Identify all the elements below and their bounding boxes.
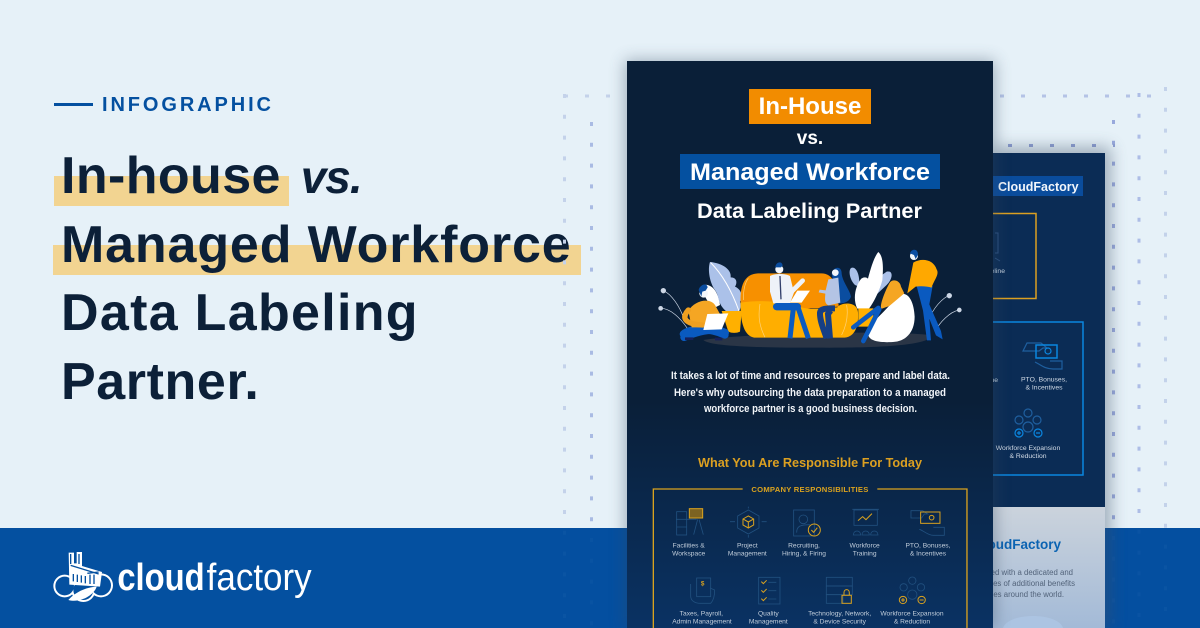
wordmark: factory: factory: [207, 556, 312, 598]
label: training: Workforce: [850, 542, 880, 549]
label: project: [728, 542, 767, 557]
intro paragraph: workforce partner is a good business decision.: [703, 403, 917, 415]
section heading: What You Are Responsible For Today: [698, 455, 923, 470]
intro paragraph: [671, 370, 950, 415]
label: PTO: & Incentives: [910, 550, 947, 557]
highlight: Managed Workforce: [53, 245, 581, 275]
label: tech: Technology, Network,: [808, 610, 871, 617]
gold frame: [653, 489, 967, 628]
label: facilities: Facilities &: [673, 542, 705, 549]
text: PTO label: PTO, Bonuses,: [1021, 376, 1067, 384]
back page blue box: [985, 322, 1083, 475]
icon: PTO: [1023, 343, 1062, 369]
back page section heading: CloudFactory: [974, 537, 1061, 552]
person: standing man: [907, 250, 943, 340]
label: PTO: [905, 542, 951, 557]
back page paragraph: companies around the world.: [964, 590, 1064, 599]
back page paragraph: opportunities of additional benefits: [957, 579, 1075, 588]
label: expansion: [880, 610, 944, 625]
text: vs.: vs.: [797, 128, 823, 149]
icon: recruiting: [794, 510, 820, 536]
badge: In-House: In-House: [759, 93, 861, 120]
back page badge: CloudFactory: [993, 176, 1083, 196]
back page paragraph: [993, 569, 1075, 597]
label: project: Project: [737, 542, 758, 549]
left plant: [703, 262, 742, 333]
label: PTO: PTO, Bonuses,: [905, 542, 951, 549]
back page blue box: Line: [985, 377, 998, 384]
badge: Managed Workforce: [680, 154, 940, 189]
panel: company responsibilities: [653, 485, 967, 628]
text: expansion label: & Reduction: [1009, 453, 1047, 460]
title line: Partner.: Partner.: [61, 353, 259, 411]
text: PTO label: & Incentives: [1025, 384, 1063, 392]
dot grid background: [564, 87, 1168, 628]
label: taxes: [672, 610, 732, 625]
back page gold box: [993, 212, 1037, 300]
text: PTO label: [1022, 377, 1066, 390]
back page circle: [1003, 616, 1063, 628]
intro paragraph: It takes a lot of time and resources to prepare and label data.: [671, 370, 950, 382]
icon: tech: [826, 577, 852, 603]
label: project: Management: [728, 550, 767, 557]
back page panel: [993, 153, 1105, 628]
intro paragraph: Here's why outsourcing the data preparation to a managed: [674, 387, 946, 399]
back page gold box: Pipeline: [981, 268, 1005, 275]
label: tech: & Device Security: [813, 618, 867, 625]
icon: taxes: [691, 578, 715, 603]
label: recruiting: [782, 542, 826, 557]
label: quality: Management: [749, 618, 788, 625]
person: woman on beanbag: [853, 280, 915, 342]
illustration: team on sofa: [659, 250, 961, 348]
subheading: Data Labeling Partner: Data Labeling Partner: [697, 200, 922, 223]
eyebrow: INFOGRAPHIC: INFOGRAPHIC: [102, 94, 274, 116]
wires: [659, 288, 961, 330]
label: facilities: Workspace: [672, 550, 706, 557]
label: expansion: & Reduction: [894, 618, 930, 625]
band tint over dots: [550, 528, 1200, 628]
label: quality: Quality: [758, 610, 779, 617]
label: recruiting: Recruiting,: [788, 542, 820, 549]
icon: expansion: [899, 577, 925, 604]
main page shadow: [625, 60, 995, 628]
eyebrow rule: [54, 103, 93, 106]
label: recruiting: Hiring, & Firing: [782, 550, 826, 557]
main page panel: [627, 61, 993, 628]
icon: cloud and factory: [53, 552, 113, 602]
person: man with laptop: [770, 262, 810, 338]
label: training: Training: [853, 550, 877, 557]
frame label: COMPANY RESPONSIBILITIES: [751, 485, 869, 494]
title line: Data Labeling: Data Labeling: [61, 284, 419, 342]
icon: project: [730, 507, 767, 538]
title line: Managed Workforce: Managed Workforce: [61, 216, 571, 274]
label: taxes: Admin Management: [672, 618, 732, 625]
sofa: [741, 273, 858, 338]
wordmark: cloud: cloud: [117, 556, 205, 598]
highlight: In-house: [54, 176, 289, 206]
logo: cloudfactory: [53, 552, 312, 602]
badge: Managed Workforce: Managed Workforce: [690, 159, 930, 186]
icon: taxes: $: [701, 580, 705, 587]
right plant: [850, 252, 892, 327]
floor shadow: [703, 333, 930, 348]
bottom brand band: [0, 528, 1200, 628]
icon: facilities: [676, 509, 703, 535]
person: woman in centre: [819, 268, 851, 338]
person: man on floor: [683, 285, 728, 339]
label: tech: [808, 610, 871, 625]
back page paragraph: partnered with a dedicated and: [966, 568, 1073, 577]
icon: PTO: [911, 511, 944, 535]
label: taxes: Taxes, Payroll,: [680, 610, 723, 617]
badge: In-House: [749, 89, 871, 124]
text: expansion label: Workforce Expansion: [996, 445, 1060, 452]
icon: training: [852, 509, 879, 535]
infographic preview mockup: [563, 50, 1167, 628]
icon: expansion: [1015, 409, 1042, 437]
label: training: [850, 542, 880, 557]
back page shadow: [993, 147, 1111, 628]
text: expansion label: [996, 446, 1060, 458]
label: facilities: [672, 542, 706, 557]
back page badge: CloudFactory: CloudFactory: [998, 180, 1079, 194]
icon: quality: [759, 577, 780, 604]
label: expansion: Workforce Expansion: [880, 610, 944, 617]
label: quality: [749, 610, 788, 625]
title line: In-house vs.: In-house vs.: [61, 147, 362, 205]
